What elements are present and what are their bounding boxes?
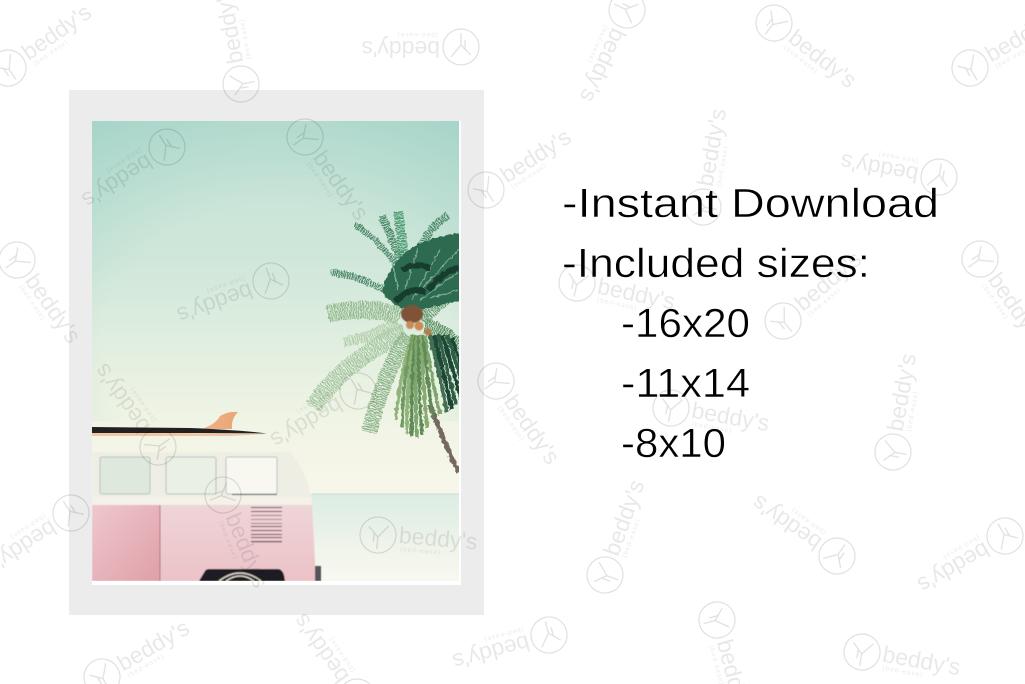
watermark	[200, 472, 277, 594]
watermark: beddy's	[221, 509, 274, 591]
palm tree	[313, 211, 463, 473]
wheel arch	[199, 569, 285, 581]
watermark: beddy's	[361, 36, 440, 62]
watermark	[745, 484, 862, 581]
description text	[562, 180, 939, 466]
watermark	[86, 355, 183, 472]
watermark: {bed-ease}	[980, 283, 1010, 321]
watermark: {bed-ease}	[483, 625, 524, 643]
watermark: beddy's	[747, 490, 826, 556]
watermark: {bed-ease}	[305, 161, 335, 199]
sky	[92, 121, 459, 581]
watermark	[285, 605, 382, 684]
watermark	[749, 0, 864, 98]
watermark: {bed-ease}	[806, 286, 843, 318]
watermark: {bed-ease}	[217, 520, 239, 561]
surfboard fin	[202, 412, 238, 429]
watermark	[361, 29, 479, 65]
watermark: {bed-ease}	[782, 44, 819, 75]
watermark: beddy's	[598, 476, 649, 559]
watermark	[448, 613, 571, 678]
size 16x20: -16x20	[621, 300, 750, 346]
watermark: {bed-ease}	[400, 546, 441, 557]
watermark: beddy's	[450, 630, 533, 675]
watermark: {bed-ease}	[906, 390, 920, 432]
watermark: beddy's	[495, 123, 575, 188]
dark crown	[382, 232, 461, 310]
watermark	[582, 475, 656, 598]
watermark	[945, 3, 1025, 93]
watermark	[569, 0, 651, 108]
vents	[251, 507, 282, 542]
watermark	[171, 258, 294, 332]
crown highlights	[392, 248, 458, 300]
watermark: {bed-ease}	[789, 506, 827, 535]
watermark	[0, 488, 96, 582]
van upper body	[98, 494, 311, 497]
watermark: beddy's	[308, 146, 374, 225]
watermark: {bed-ease}	[17, 284, 47, 322]
watermark: {bed-ease}	[877, 150, 919, 164]
watermark: beddy's	[692, 106, 731, 188]
van lower left panel	[92, 505, 160, 581]
sky vignette	[92, 121, 459, 421]
watermark: beddy's	[575, 24, 632, 107]
watermark: {bed-ease}	[205, 274, 246, 295]
watermark: beddy's	[78, 149, 158, 214]
watermark: {bed-ease}	[8, 512, 47, 541]
watermark: {bed-ease}	[510, 162, 549, 191]
watermark	[280, 112, 377, 229]
watermark	[77, 612, 197, 684]
watermark: beddy's	[398, 522, 478, 555]
watermark: {bed-ease}	[327, 635, 357, 673]
van belt	[300, 497, 312, 505]
watermark: {bed-ease}	[496, 405, 526, 443]
van	[92, 452, 321, 581]
watermark: beddy's	[784, 24, 862, 93]
watermark	[0, 0, 100, 93]
photo: beach scene	[92, 121, 463, 581]
watermark: beddy's	[789, 246, 866, 316]
dark right frond	[430, 335, 463, 412]
watermark: {bed-ease}	[716, 145, 730, 187]
coconuts	[401, 305, 432, 336]
watermark	[461, 121, 579, 215]
watermark	[650, 387, 772, 443]
door seam	[160, 505, 161, 581]
watermark: {bed-ease}	[32, 38, 70, 68]
watermark: beddy's	[266, 392, 347, 454]
watermark: {bed-ease}	[941, 534, 981, 560]
shoreline	[312, 494, 459, 495]
sea and sand	[310, 494, 459, 546]
watermark: {bed-ease}	[239, 18, 253, 60]
watermark: beddy's	[913, 537, 994, 599]
watermark	[471, 356, 568, 473]
watermark: {bed-ease}	[691, 421, 733, 435]
watermark	[872, 351, 928, 473]
watermark	[682, 106, 738, 228]
watermark: beddy's	[113, 614, 194, 676]
watermark	[910, 511, 1025, 601]
hanging fronds	[396, 335, 440, 438]
watermark	[695, 598, 760, 684]
watermark: {bed-ease}	[128, 385, 158, 423]
size 8x10: -8x10	[621, 420, 726, 466]
van windows	[100, 457, 277, 494]
watermark	[0, 235, 89, 352]
watermark: beddy's	[499, 390, 565, 469]
watermark	[955, 234, 1025, 351]
watermark: beddy's	[174, 278, 256, 329]
size 11x14: -11x14	[621, 360, 750, 406]
watermark	[358, 515, 479, 562]
watermark	[841, 631, 963, 684]
watermark: {bed-ease}	[294, 389, 334, 415]
rear tyre	[315, 566, 321, 581]
watermark: beddy's	[17, 0, 96, 65]
light left fronds	[313, 310, 408, 432]
watermark	[556, 262, 678, 321]
watermark: {bed-ease}	[104, 146, 143, 175]
watermark: beddy's	[882, 351, 921, 433]
watermark	[263, 366, 383, 456]
watermark: beddy's	[89, 359, 155, 438]
watermark: {bed-ease}	[585, 24, 609, 65]
van lower body	[160, 505, 316, 581]
surfboard	[92, 427, 267, 436]
upper fronds	[331, 211, 461, 350]
wheel hub	[219, 573, 261, 581]
watermark: beddy's	[595, 273, 678, 314]
watermark: beddy's	[20, 269, 86, 348]
photo mat edge	[92, 121, 461, 585]
watermark: {bed-ease}	[397, 31, 438, 38]
window sill dark line	[232, 494, 277, 495]
watermark	[206, 0, 262, 105]
picture frame	[69, 90, 484, 615]
watermark	[758, 243, 871, 346]
crown shadows	[395, 265, 459, 302]
watermark: beddy's	[838, 149, 920, 188]
watermark: beddy's	[690, 397, 772, 436]
watermark	[74, 122, 192, 216]
watermark: {bed-ease}	[126, 653, 166, 679]
watermark	[838, 142, 960, 198]
watermark: {bed-ease}	[596, 297, 638, 312]
watermark: {bed-ease}	[882, 665, 924, 679]
line: included sizes: -Included sizes:	[562, 240, 870, 286]
watermark: {bed-ease}	[621, 518, 642, 559]
line: instant download: -Instant Download	[562, 180, 939, 226]
trunk	[430, 405, 459, 473]
watermark: beddy's	[881, 641, 963, 680]
